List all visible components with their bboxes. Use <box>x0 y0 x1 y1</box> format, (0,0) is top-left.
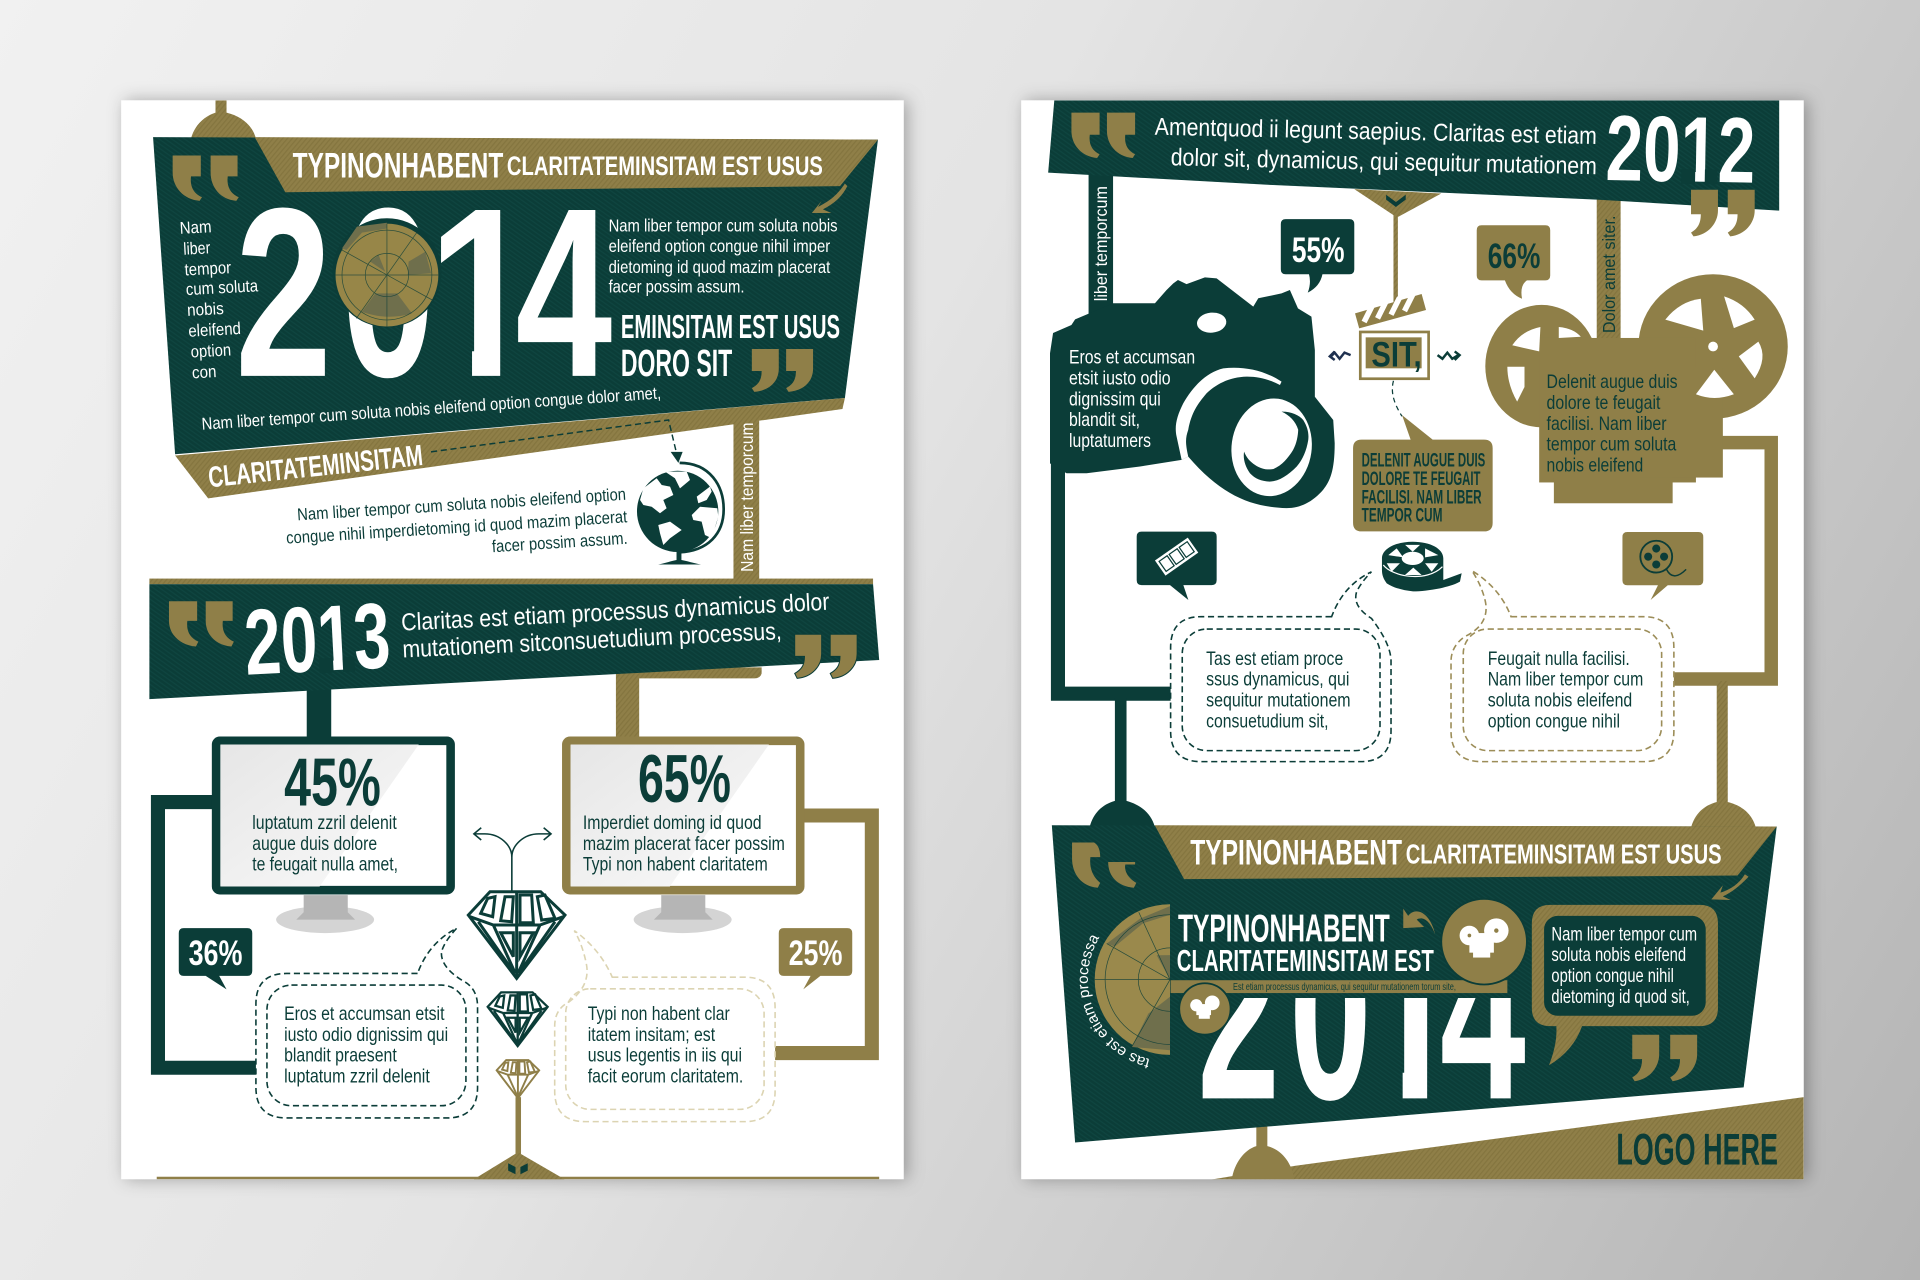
curved arrow <box>1403 909 1435 934</box>
camera text: dignissim qui <box>1069 388 1161 410</box>
banner text: mutationem sitconsuetudium processus, <box>402 618 782 664</box>
green bar <box>1089 169 1113 316</box>
gold top edge <box>149 579 873 584</box>
gold ribbon <box>1155 825 1777 879</box>
side text column: option <box>190 339 232 362</box>
right paragraph: Nam liber tempor cum soluta nobis <box>609 215 838 235</box>
right paragraph: dietoming id quod mazim placerat <box>609 257 830 277</box>
screen gloss <box>571 744 769 887</box>
open quote mark <box>1072 842 1136 888</box>
lens arc <box>1176 368 1282 460</box>
panel: bottom logo strip <box>1206 1097 1804 1180</box>
dashed callout: left: iusto odio dignissim qui <box>284 1024 448 1046</box>
ribbon title <box>1190 832 1722 872</box>
monitor text <box>583 812 785 876</box>
side text column: tempor <box>184 257 232 280</box>
bracket from camera <box>1058 453 1173 694</box>
ribbon title: CLARITATEMINSITAM EST USUS <box>1406 838 1722 869</box>
banner shape <box>149 584 879 699</box>
inner heading: CLARITATEMINSITAM EST <box>1177 944 1434 978</box>
gold strip <box>1171 980 1507 993</box>
ribbon title <box>292 152 822 178</box>
side text column <box>179 216 259 382</box>
callout: 25%: 25% <box>789 933 842 973</box>
gold stem and dome <box>1691 681 1756 828</box>
gold strip: Est etiam processus dynamicus, qui sequitur mutationem torum site, <box>1233 982 1456 993</box>
close quote mark <box>752 349 813 392</box>
ribbon title: CLARITATEMINSITAM EST USUS <box>507 151 823 181</box>
vertical label: liber temporcum <box>1091 186 1111 301</box>
monitor text: luptatum zzril delenit <box>252 812 397 834</box>
dashed callout: left: Eros et accumsan etsit <box>284 1003 445 1025</box>
ribbon title: TYPINONHABENT <box>293 146 503 186</box>
callout: delenit text: DELENIT AUGUE DUIS <box>1362 450 1485 472</box>
callout: 25% <box>779 928 852 989</box>
icon: small gold diamond <box>497 1060 539 1098</box>
dashed callout: left <box>256 928 478 1118</box>
panel: monitor 65% <box>566 741 800 933</box>
close quote mark <box>1691 190 1755 236</box>
monitor frame <box>216 741 451 890</box>
icon: film projector <box>1485 274 1788 679</box>
page: left sheet <box>121 100 904 1179</box>
ribbon title: TYPINONHABENT <box>1190 832 1402 872</box>
camera text: luptatumers <box>1069 430 1151 452</box>
dashed callout: right: facit eorum claritatem. <box>588 1065 743 1087</box>
projector text: facilisi. Nam liber <box>1547 413 1667 435</box>
green banner <box>1052 825 1777 1142</box>
side text column: Nam <box>179 216 212 238</box>
panel: 2014 header, left sheet <box>153 100 878 580</box>
callout: delenit text <box>1353 415 1493 531</box>
projector text <box>1547 371 1678 476</box>
green stem and dome <box>1090 698 1155 827</box>
dashed callout: right: Typi non habent clar <box>588 1003 730 1025</box>
open quote mark <box>169 601 234 647</box>
dashed callout: projector side: soluta nobis eleifend <box>1488 690 1632 712</box>
slanted caption: Nam liber tempor cum soluta nobis eleifend option congue dolor amet, <box>201 383 662 434</box>
dashed callout: right: usus legentis in iis qui <box>588 1045 742 1067</box>
monitor text <box>252 812 398 876</box>
cut-off year 2014: 4 <box>1440 872 1526 1152</box>
panel: monitor 45% <box>216 741 451 933</box>
lower stem and dome <box>1232 1127 1294 1179</box>
big year 2014: 1 <box>427 159 539 428</box>
dashed arrow to globe <box>431 420 683 463</box>
banner text <box>1154 118 1596 176</box>
strip label: CLARITATEMINSITAM <box>207 439 424 494</box>
lamp dome connector <box>191 100 256 138</box>
lens crescent <box>1244 412 1308 482</box>
side text column: eleifend <box>188 318 241 341</box>
side text column: liber <box>183 237 211 259</box>
big year 2014: 2 <box>235 159 332 428</box>
year 2012: 2012 <box>1605 96 1756 203</box>
gold connector behind banner <box>616 667 762 740</box>
ribbon arrow <box>1711 874 1749 900</box>
camera text: blandit sit, <box>1069 409 1140 431</box>
dashed callout: right <box>555 931 775 1122</box>
speech bubble: dietoming id quod sit, <box>1551 987 1690 1008</box>
panel: 2013 banner <box>149 579 879 740</box>
banner text: dolor sit, dynamicus, qui sequitur mutationem <box>1170 144 1597 180</box>
header banner <box>1048 100 1779 211</box>
right sheet connectors <box>1048 96 1779 343</box>
icon: film roll <box>1382 542 1462 591</box>
dashed callout: projector side: option congue nihil <box>1488 710 1620 732</box>
speech bubble: Nam liber tempor cum <box>1551 924 1697 945</box>
callout: 55%: 55% <box>1292 230 1344 270</box>
year 2012 <box>1608 115 1752 183</box>
year 2013: 2013 <box>242 583 393 695</box>
logo text: LOGO HERE <box>1616 1125 1778 1174</box>
cut-off year 2014: 1 <box>1364 872 1460 1152</box>
callout: delenit text: DOLORE TE FEUGAIT <box>1362 468 1480 490</box>
dashed callout: projector side: Feugait nulla facilisi. <box>1488 648 1630 670</box>
viewfinder <box>1196 311 1227 334</box>
monitor text: te feugait nulla amet, <box>252 854 398 876</box>
callout: delenit text: TEMPOR CUM <box>1362 505 1442 527</box>
callout: 55% <box>1281 219 1354 293</box>
inner heading: TYPINONHABENT <box>1178 908 1390 951</box>
gold arrowhead and stem <box>1354 189 1441 302</box>
cut-off year 2014 <box>1202 998 1525 1101</box>
cut-off year 2014: 0 <box>1289 872 1371 1152</box>
dashed callout: camera side: sequitur mutationem <box>1206 690 1351 712</box>
callout: 66%: 66% <box>1488 236 1540 276</box>
side text column: con <box>191 361 217 382</box>
open quote mark <box>173 156 239 201</box>
projector text: Delenit augue duis <box>1547 371 1678 393</box>
arrow: squiggle right <box>1438 351 1460 360</box>
big year 2014 <box>241 208 612 378</box>
dashed callout: camera side: consuetudium sit, <box>1206 710 1329 732</box>
dashed callout: projector side: Nam liber tempor cum <box>1488 669 1643 691</box>
bracket from projector <box>1673 443 1771 679</box>
open quote mark <box>1071 113 1135 158</box>
connector bracket green <box>158 802 262 1068</box>
camera text <box>1069 347 1195 452</box>
subheading: DORO SIT <box>621 343 732 385</box>
projector text: nobis eleifend <box>1547 454 1643 476</box>
dashed callout: camera side: Tas est etiam proce <box>1206 648 1343 670</box>
icon: camera with text <box>1050 277 1335 694</box>
speech bubble <box>1532 905 1718 1065</box>
monitor text: Imperdiet doming id quod <box>583 812 762 834</box>
globe paragraph <box>286 488 628 554</box>
panel: bottom 2014 banner <box>1052 681 1777 1142</box>
cut-off year 2014: 2 <box>1198 872 1280 1152</box>
globe paragraph: Nam liber tempor cum soluta nobis eleifend option <box>297 484 627 524</box>
screen gloss <box>220 744 419 887</box>
green connector <box>307 686 331 740</box>
globe paragraph: facer possim assum. <box>491 528 628 556</box>
big year 2014: 4 <box>516 159 612 428</box>
year 2013 <box>242 583 393 695</box>
gold top ribbon <box>255 137 878 192</box>
callout: 36% <box>179 928 252 989</box>
dashed callout: camera side: ssus dynamicus, qui <box>1206 669 1349 691</box>
reel cut-outs <box>1507 296 1762 402</box>
dashed callout: left: blandit praesent <box>284 1045 397 1067</box>
banner text <box>401 589 830 664</box>
page: right sheet <box>1021 100 1804 1179</box>
gold bar with label: Dolor amet siter. <box>1599 216 1619 333</box>
lens ring <box>1225 393 1318 501</box>
banner text: Claritas est etiam processus dynamicus dolor <box>401 589 830 637</box>
monitor stand <box>276 895 374 933</box>
arrow: branching from diamond <box>474 828 551 891</box>
camera text: Eros et accumsan <box>1069 347 1195 369</box>
monitor text: augue duis dolore <box>252 833 377 855</box>
inner heading <box>1177 908 1434 978</box>
icon: medium diamond <box>488 992 548 1046</box>
subheading <box>622 314 840 376</box>
projector text: tempor cum soluta <box>1547 434 1676 456</box>
radial chart disc <box>332 218 441 327</box>
icon bubble: film strip <box>1137 532 1217 600</box>
gold stem and base marker <box>157 1097 879 1179</box>
stat 65%: 65% <box>638 742 731 817</box>
connector bracket gold <box>771 816 872 1053</box>
icon: small projector circle <box>1179 983 1231 1035</box>
right paragraph: facer possim assum. <box>609 277 744 297</box>
close quote mark <box>795 634 857 678</box>
side text column: cum soluta <box>185 275 259 299</box>
dashed callout: projector side <box>1451 571 1674 762</box>
radial half disc <box>1094 904 1170 1055</box>
icon: clapperboard SIT: SIT, <box>1371 335 1422 375</box>
monitor text: mazim placerat facer possim <box>583 833 785 855</box>
callout: delenit text: FACILISI. NAM LIBER <box>1362 486 1482 508</box>
icon: large diamond <box>468 892 565 978</box>
projector text: dolore te feugait <box>1547 392 1661 414</box>
close quote mark <box>1632 1035 1697 1081</box>
speech bubble: option congue nihil <box>1551 966 1674 987</box>
speech bubble: soluta nobis eleifend <box>1551 945 1686 966</box>
curved caption: tas est etiam processa <box>1080 936 1149 1068</box>
arrow: squiggle left <box>1330 351 1351 360</box>
camera text: etsit iusto odio <box>1069 367 1171 389</box>
big year 2014: 0 <box>342 159 435 428</box>
callout: 66% <box>1477 225 1550 299</box>
dashed callout: right: itatem insitam; est <box>588 1024 716 1046</box>
subheading: EMINSITAM EST USUS <box>621 309 840 346</box>
icon: clapperboard SIT <box>1355 294 1430 380</box>
side text column: nobis <box>187 298 224 320</box>
globe paragraph: congue nihil imperdietoming id quod mazim placerat <box>286 506 628 548</box>
right paragraph: eleifend option congue nihil imper <box>609 236 830 256</box>
icon bubble: film reel <box>1622 532 1703 600</box>
dashed callout: left: luptatum zzril delenit <box>284 1065 430 1087</box>
icon: globe <box>637 463 724 564</box>
dashed line to callout <box>1392 381 1402 416</box>
camera body <box>1050 277 1335 508</box>
monitor stand <box>634 895 732 933</box>
ribbon arrow <box>812 184 847 213</box>
icon: large projector circle <box>1441 899 1527 984</box>
stat 45%: 45% <box>284 746 381 821</box>
vertical connector with label: Nam liber temporcum <box>737 422 757 572</box>
projector silhouette <box>1485 274 1788 503</box>
callout: 36%: 36% <box>189 933 242 973</box>
right paragraph <box>609 215 838 297</box>
green banner shape <box>153 137 878 454</box>
gold lower strip <box>175 398 845 498</box>
banner text: Amentquod ii legunt saepius. Claritas est etiam <box>1155 114 1597 150</box>
dashed callout: camera side <box>1171 572 1391 762</box>
monitor frame <box>566 741 800 890</box>
monitor text: Typi non habent claritatem <box>583 854 768 876</box>
gold wedge <box>1206 1097 1804 1180</box>
